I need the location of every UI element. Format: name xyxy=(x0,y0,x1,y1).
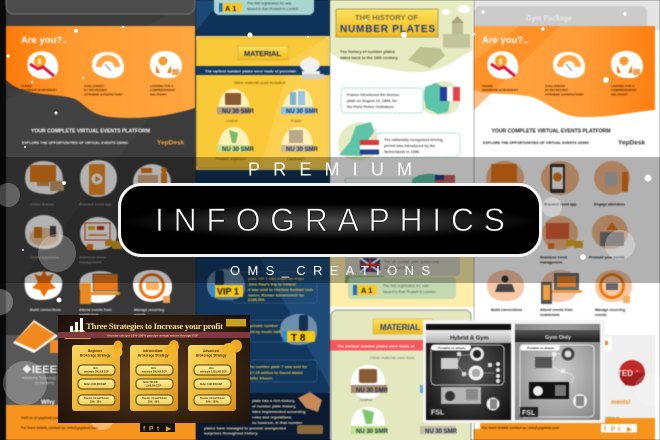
panel: pale yellow UK section: The UK number plate system was xyxy=(384,260,439,264)
item: plastic: NU 30 SMR xyxy=(286,109,319,115)
labels: platform features: Manage recurring xyxy=(595,308,625,312)
card: advanced: Advanced xyxy=(203,349,219,353)
card: intermediate: Passive Annual Return xyxy=(142,397,168,400)
panel: navy number plates infographic xyxy=(196,0,330,440)
blob: green header background xyxy=(330,0,473,72)
item: pressed soybeans xyxy=(351,407,389,435)
illustration: castle sketch xyxy=(408,16,470,68)
item: cardboard: NU 30 SMR xyxy=(425,429,458,435)
icon grid: platform features xyxy=(25,160,172,304)
plate: material title: MATERIAL xyxy=(380,323,420,332)
icon: falling revenue: $ xyxy=(498,59,502,66)
plate: material title xyxy=(373,319,433,334)
labels: three challenges: CHALLENGED xyxy=(84,84,104,88)
icon: falling revenue xyxy=(27,51,58,79)
card: intermediate: 35% - 60% xyxy=(148,402,159,404)
diagram: hybrid and gym: FSL xyxy=(431,410,445,416)
icon: orange phone tile xyxy=(13,320,62,353)
card: intermediate: Unit xyxy=(151,367,156,370)
text block: closing note: plates have managed to provide unexpected xyxy=(204,426,287,430)
labels: three challenges: ATTENDEE SATISFACTION? xyxy=(84,92,123,96)
callout: Netherlands: Netherlands in 1898. xyxy=(384,150,420,154)
callout: A1 registration xyxy=(348,277,456,299)
labels: platform features: Engage attendees xyxy=(594,202,625,206)
labels: platform features: management xyxy=(79,260,102,264)
card: beginner: Refer 2,500,000 EGP xyxy=(84,384,107,386)
card: advanced: Refer 2,000,000 EGP xyxy=(200,384,223,386)
card: intermediate xyxy=(130,340,179,411)
heading: gym package xyxy=(474,6,647,36)
card: advanced: 60% - 100% xyxy=(206,402,219,404)
callout: Netherlands xyxy=(338,122,460,160)
panel: three strategies card xyxy=(58,315,250,423)
diagram: hybrid and gym: Portable on wheels xyxy=(438,346,466,350)
callout: France: France introduced the license xyxy=(347,93,399,97)
icons: social links xyxy=(601,424,637,433)
plate: title: NUMBER PLATES xyxy=(340,24,435,35)
section: TED event xyxy=(474,335,655,420)
callout: VIP 1: John Paul's trip to Ireland. xyxy=(248,282,297,286)
section: TED event: ments! xyxy=(611,400,631,406)
labels: three challenges: LOOKING FOR A xyxy=(611,84,635,88)
title: infographics: INFOGRAPHICS xyxy=(155,202,505,238)
footer: orange contact band: Visit us @ yepdesk.com xyxy=(21,416,60,420)
item: cardboard xyxy=(420,426,458,435)
text: history intro xyxy=(340,49,398,60)
item: pressed soybeans: NU 30 SMR xyxy=(356,429,389,435)
credit: OMS creations: OMS_CREATIONS xyxy=(230,263,430,278)
labels: three challenges: COMPREHENSIVE xyxy=(150,88,175,92)
callout: A1 registration: issued to Earl Russell in London. xyxy=(383,290,437,294)
orange header shape xyxy=(6,26,195,118)
section: TED event: x xyxy=(636,368,639,373)
banner: passive annual return xyxy=(58,332,250,338)
plate: material title: MATERIAL xyxy=(244,49,281,58)
banner: passive annual return: Anyone can get 10%-100% passive annual return through ESF xyxy=(107,333,198,337)
callout: A1 registration: The first registration A1 was xyxy=(383,284,429,288)
labels: platform features: Seamless event xyxy=(540,256,568,260)
panel: gym package infographic xyxy=(474,0,660,440)
card: beginner: 20% - 30% xyxy=(90,402,101,404)
labels: platform features: Seamless event xyxy=(79,256,107,260)
title tag: premium: PREMIUM xyxy=(248,160,412,180)
card: advanced xyxy=(188,340,242,411)
diagram: hybrid and gym: Hybrid & Gym xyxy=(450,336,489,342)
panel: pale yellow UK section: introduced in 1903. xyxy=(384,266,415,270)
plate: title: THE HISTORY OF xyxy=(355,13,418,22)
callout: USA xyxy=(345,174,455,190)
card: intermediate: Brokerage Strategy xyxy=(138,354,169,358)
item: cardboard xyxy=(281,127,319,161)
callout: France: the Paris Police Ordinance. xyxy=(347,105,395,109)
labels: three challenges: BY DECREASED xyxy=(545,88,568,92)
text block: closing note: lates implemented according xyxy=(252,409,306,414)
item: leather: NU 30 SMR xyxy=(222,109,255,115)
callout: number plate T: affer Khouri. xyxy=(250,376,273,380)
labels: platform features: Branded event app xyxy=(79,202,112,206)
labels: three challenges xyxy=(482,84,636,96)
item: leather xyxy=(217,89,255,123)
icon: teapot xyxy=(300,56,324,79)
card: advanced: minimum 1,000,000 EGP xyxy=(200,372,227,374)
heading: gym package: Gym Package xyxy=(526,16,572,22)
text: history intro: dates back to the 18th century. xyxy=(340,55,398,60)
orange header shape xyxy=(474,26,655,117)
title plate: black rounded banner xyxy=(120,184,540,256)
icon: speedometer xyxy=(553,52,585,78)
item: leather: Leather xyxy=(360,398,373,402)
card: advanced: Passive Annual Return xyxy=(200,397,226,400)
banner: earliest plates: The earliest number plates were made of porcelain xyxy=(205,70,297,74)
callout: number plate T: he number plate T was sold for xyxy=(250,364,308,369)
icons: clouds xyxy=(442,5,470,15)
callout: T 8 xyxy=(250,314,317,345)
footer: orange contact band: For more details contact us: info@yepdesk.com xyxy=(21,426,98,430)
logo: YepDesk: YepDesk xyxy=(157,140,184,146)
icons: strategy social links: ▶ xyxy=(165,426,172,432)
callout: VIP 1: VIP 1 xyxy=(217,286,239,296)
subheading: explore opportunities: EXPLORE THE OPPORTUNITIES OF VIRTUAL EVENTS USING xyxy=(22,141,128,145)
heading: are you: Are you?.. xyxy=(482,35,528,46)
item: cardboard: NU 30 SMR xyxy=(286,147,319,153)
labels: platform features: Build connections xyxy=(491,308,522,312)
labels: platform features: Build connections xyxy=(30,308,61,312)
labels: platform features: management xyxy=(540,260,563,264)
callout: VIP 1: plate VIP 1 was made for Pope xyxy=(248,276,305,281)
item: cardboard: Cardboard xyxy=(287,157,304,161)
callout: T 8: private number xyxy=(250,323,279,328)
panel: dark virtual events infographic xyxy=(6,0,196,440)
callout: Netherlands: The nationally recognized driving xyxy=(384,138,443,142)
diagram: gym only xyxy=(515,324,600,420)
card: intermediate: minimum 500,000 EGP xyxy=(142,372,167,374)
item: pressed soybeans: NU 30 SMR xyxy=(222,147,255,153)
labels: platform features: Online Events xyxy=(30,202,54,206)
icon: falling revenue xyxy=(487,51,518,79)
section: TED event: follow us xyxy=(606,416,619,420)
heading: platform: YOUR COMPLETE VIRTUAL EVENTS PLATFORM xyxy=(492,128,610,134)
icon: rising gold bars xyxy=(64,318,91,339)
panel: material xyxy=(196,36,330,170)
card: beginner: minimum 100,000 EGP xyxy=(84,372,109,374)
labels: three challenges: DECREASE IN REVENUE? xyxy=(482,88,519,92)
labels: three challenges: LOOKING FOR A xyxy=(150,84,174,88)
icon: hands and bulb xyxy=(611,51,643,78)
icons: strategy social links xyxy=(140,423,175,432)
labels: platform features xyxy=(491,202,625,317)
callout: VIP 1: It was sold to Chelsea football club xyxy=(248,287,313,292)
item: leather: Leather xyxy=(226,119,239,123)
icon grid: platform features xyxy=(486,161,632,304)
item: plastic xyxy=(281,89,319,123)
labels: platform features: Branded event app xyxy=(544,202,577,206)
callout: A1 registration: A 1 xyxy=(225,4,236,13)
item: pressed soybeans xyxy=(216,127,255,161)
card: beginner: Brokerage Strategy xyxy=(80,354,111,358)
labels: platform features: events xyxy=(134,313,145,317)
heading: are you: Are you?.. xyxy=(21,35,67,46)
heading: platform: YOUR COMPLETE VIRTUAL EVENTS PLATFORM xyxy=(31,128,150,134)
diagram: gym only: Portable on wheels xyxy=(527,346,555,350)
labels: three challenges: SOLUTION? xyxy=(611,92,628,96)
diagram: gym only: Gym Only xyxy=(545,335,572,341)
labels: three challenges: SOLUTION? xyxy=(150,92,167,96)
banner: earliest plates xyxy=(330,340,430,350)
card: beginner: Beginner xyxy=(88,349,103,353)
strip: dark translucent band xyxy=(0,157,660,283)
item: pressed soybeans: Pressed soybeans xyxy=(216,157,246,161)
labels: three challenges: DECREASE IN REVENUE? xyxy=(21,88,58,92)
text block: closing note: of number plate history, xyxy=(252,404,296,408)
item: plastic tag xyxy=(420,385,428,393)
icons: social links: t xyxy=(618,427,620,433)
footer: orange contact band xyxy=(6,405,196,440)
icons: social links: f xyxy=(604,427,607,433)
text: other materials: Other material used inclu xyxy=(370,355,414,360)
callout: number plate T: £7.25 million to Saeed Abdul xyxy=(250,370,303,375)
logo: IEEE: ❖IEEE xyxy=(22,364,57,376)
title: three strategies: Three Strategies to Increase your profit xyxy=(86,321,223,331)
panel: green material section xyxy=(330,310,471,440)
callout: A1 registration: A 1 xyxy=(361,286,372,295)
item: leather xyxy=(351,365,389,402)
icon: falling revenue: $ xyxy=(38,59,42,66)
card: advanced: Brokerage Strategy xyxy=(196,354,227,358)
footer: orange contact band xyxy=(474,418,655,440)
labels: three challenges xyxy=(21,84,175,96)
callout: VIP 1 xyxy=(207,269,317,303)
card: beginner: Passive Annual Return xyxy=(84,397,110,400)
text block: closing note: ne however, in that number xyxy=(252,420,303,425)
callout: France xyxy=(341,81,460,115)
section: TED event: TED xyxy=(617,369,633,378)
text block: closing note xyxy=(196,392,330,440)
icons: social links: ▶ xyxy=(626,426,632,433)
text: history intro: The history of number plates xyxy=(340,49,396,54)
panel: pale yellow UK section xyxy=(330,220,474,307)
logo: IEEE: Advancing Technology xyxy=(22,376,56,380)
labels: platform features xyxy=(30,202,164,317)
card: intermediate: - 1,000,000 EGP xyxy=(144,386,162,388)
labels: platform features: Attend events from xyxy=(540,308,573,312)
text: other materials: Other material used included: xyxy=(234,81,286,85)
callout: number plate T xyxy=(250,360,317,382)
diagram: hybrid and gym xyxy=(426,324,511,420)
callout: A1 registration: The first registration A1 was xyxy=(247,2,292,6)
icons: strategy social links: t xyxy=(157,426,160,432)
card: intermediate: Intermediate xyxy=(143,349,163,353)
labels: platform features: Manage recurring xyxy=(134,308,164,312)
callout: France: plate on August 14, 1893, for xyxy=(347,99,398,103)
icons: strategy social links: P xyxy=(149,426,154,432)
logo: YepDesk: YepDesk xyxy=(618,140,645,146)
icons: social links: P xyxy=(611,427,615,433)
item: leather: NU 30 SMR xyxy=(356,388,389,394)
labels: platform features: mobile/web xyxy=(540,313,560,317)
logo: IEEE xyxy=(22,364,57,385)
text block: closing note: surprises throughout history. xyxy=(204,430,258,436)
subheading: explore opportunities: EXPLORE THE OPPORTUNITIES OF VIRTUAL EVENTS USING xyxy=(483,141,589,145)
labels: three challenges: CHALLENGED xyxy=(545,84,565,88)
logo: IEEE: for Humanity xyxy=(35,381,55,385)
icon: speedometer xyxy=(92,52,124,78)
callout: T 8: ed by music hall xyxy=(250,329,280,334)
card: advanced: Unit xyxy=(209,367,214,370)
plate: title xyxy=(336,9,438,37)
card: beginner: Unit xyxy=(93,367,98,370)
labels: three challenges: FACING xyxy=(21,84,33,88)
labels: three challenges: COMPREHENSIVE xyxy=(611,88,636,92)
item: plastic: Plastic xyxy=(291,119,302,123)
labels: three challenges: ATTENDEE SATISFACTION? xyxy=(545,92,584,96)
labels: platform features: Promote your events xyxy=(589,256,625,260)
callout: VIP 1: owner, Roman Abramovich for xyxy=(248,292,305,298)
panel: history of number plates xyxy=(330,0,474,440)
callout: VIP 1: £285,000. xyxy=(248,297,265,302)
text block: closing note: rules and regulations. xyxy=(252,414,292,420)
labels: platform features: mobile/web xyxy=(79,313,99,317)
diagram: gym only: FSL xyxy=(522,410,536,417)
labels: platform features: Attend events from xyxy=(79,308,112,312)
logo: gold badge xyxy=(226,319,246,326)
heading: why: Why xyxy=(41,399,55,406)
labels: platform features: events xyxy=(595,313,606,317)
text block: closing note: plate has a rich history, xyxy=(252,398,295,403)
panel: FSL comparison card xyxy=(423,320,605,423)
card: intermediate: Refer 500,000 xyxy=(143,382,159,384)
callout: T 8: T 8 xyxy=(291,333,306,344)
labels: three challenges: BY DECREASED xyxy=(84,88,107,92)
labels: platform features: Online payments xyxy=(30,256,59,260)
icons: strategy social links: f xyxy=(143,426,146,432)
banner: earliest plates: The earliest number plates were made of xyxy=(337,344,415,348)
icon: hands and bulb xyxy=(150,51,182,78)
callout: A1 registration: issued to Earl Russell in London. xyxy=(247,7,299,11)
card: beginner xyxy=(72,340,122,411)
callout: A1 registration xyxy=(214,0,314,15)
panel: lower navy section xyxy=(196,258,330,440)
callout: Netherlands: permit was introduced by the xyxy=(384,144,435,148)
labels: three challenges: FACING xyxy=(482,84,494,88)
footer: orange contact band: For more details contact us: info@yepdesk.com xyxy=(482,426,559,430)
